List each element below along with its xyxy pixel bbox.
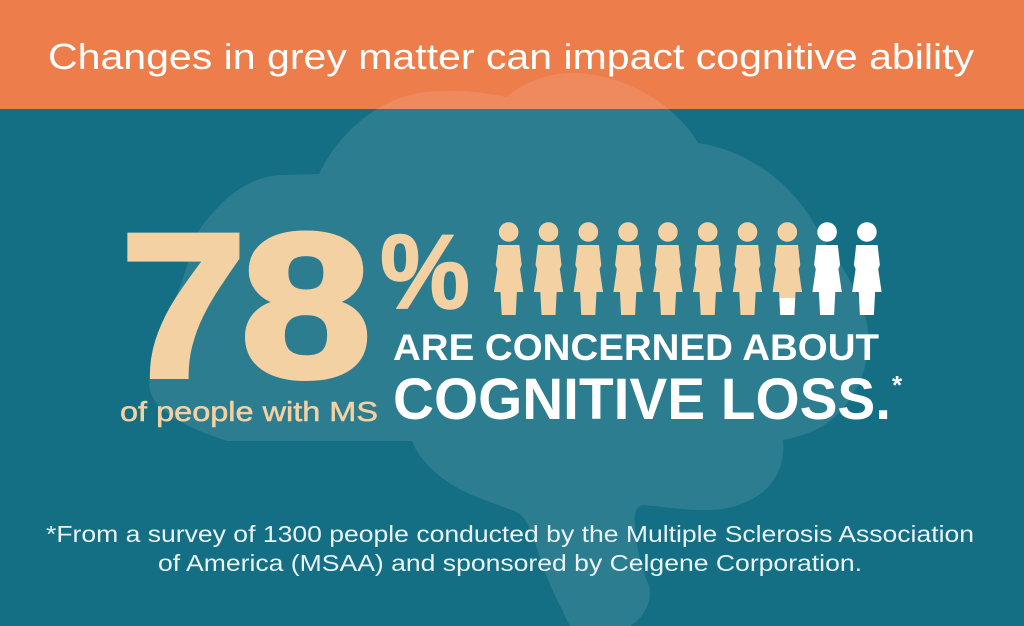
figure 5 bbox=[653, 222, 683, 315]
headline line 1: ARE CONCERNED ABOUT bbox=[393, 327, 879, 368]
figure 3 bbox=[574, 222, 603, 315]
digit 7: 7 bbox=[121, 192, 246, 420]
footnote line 1: *From a survey of 1300 people conducted by the Multiple Sclerosis Association bbox=[46, 521, 974, 547]
pictogram: 10 figures, 7.8 filled bbox=[494, 222, 882, 315]
asterisk: * bbox=[892, 370, 903, 400]
digit 8: 8 bbox=[241, 192, 371, 420]
footnote bbox=[46, 521, 974, 576]
orange header band bbox=[0, 0, 1024, 109]
figure 1 bbox=[494, 222, 523, 315]
headline line 2: COGNITIVE LOSS. bbox=[393, 367, 891, 432]
title: Changes in grey matter can impact cognitive ability bbox=[48, 36, 974, 77]
figure 9 bbox=[812, 222, 842, 315]
percent sign: % bbox=[380, 213, 470, 331]
figure 4 bbox=[613, 222, 643, 315]
figure 7 bbox=[733, 222, 762, 315]
big statistic: 78 bbox=[121, 192, 371, 420]
figure 10 bbox=[852, 222, 882, 315]
footnote line 2: of America (MSAA) and sponsored by Celgene Corporation. bbox=[158, 550, 862, 576]
label: of people with MS: of people with MS bbox=[120, 396, 378, 427]
figure 6 bbox=[693, 222, 722, 315]
figure 8, partly filled bbox=[773, 222, 802, 315]
brain silhouette bbox=[149, 73, 868, 626]
figure 2 bbox=[534, 222, 563, 315]
